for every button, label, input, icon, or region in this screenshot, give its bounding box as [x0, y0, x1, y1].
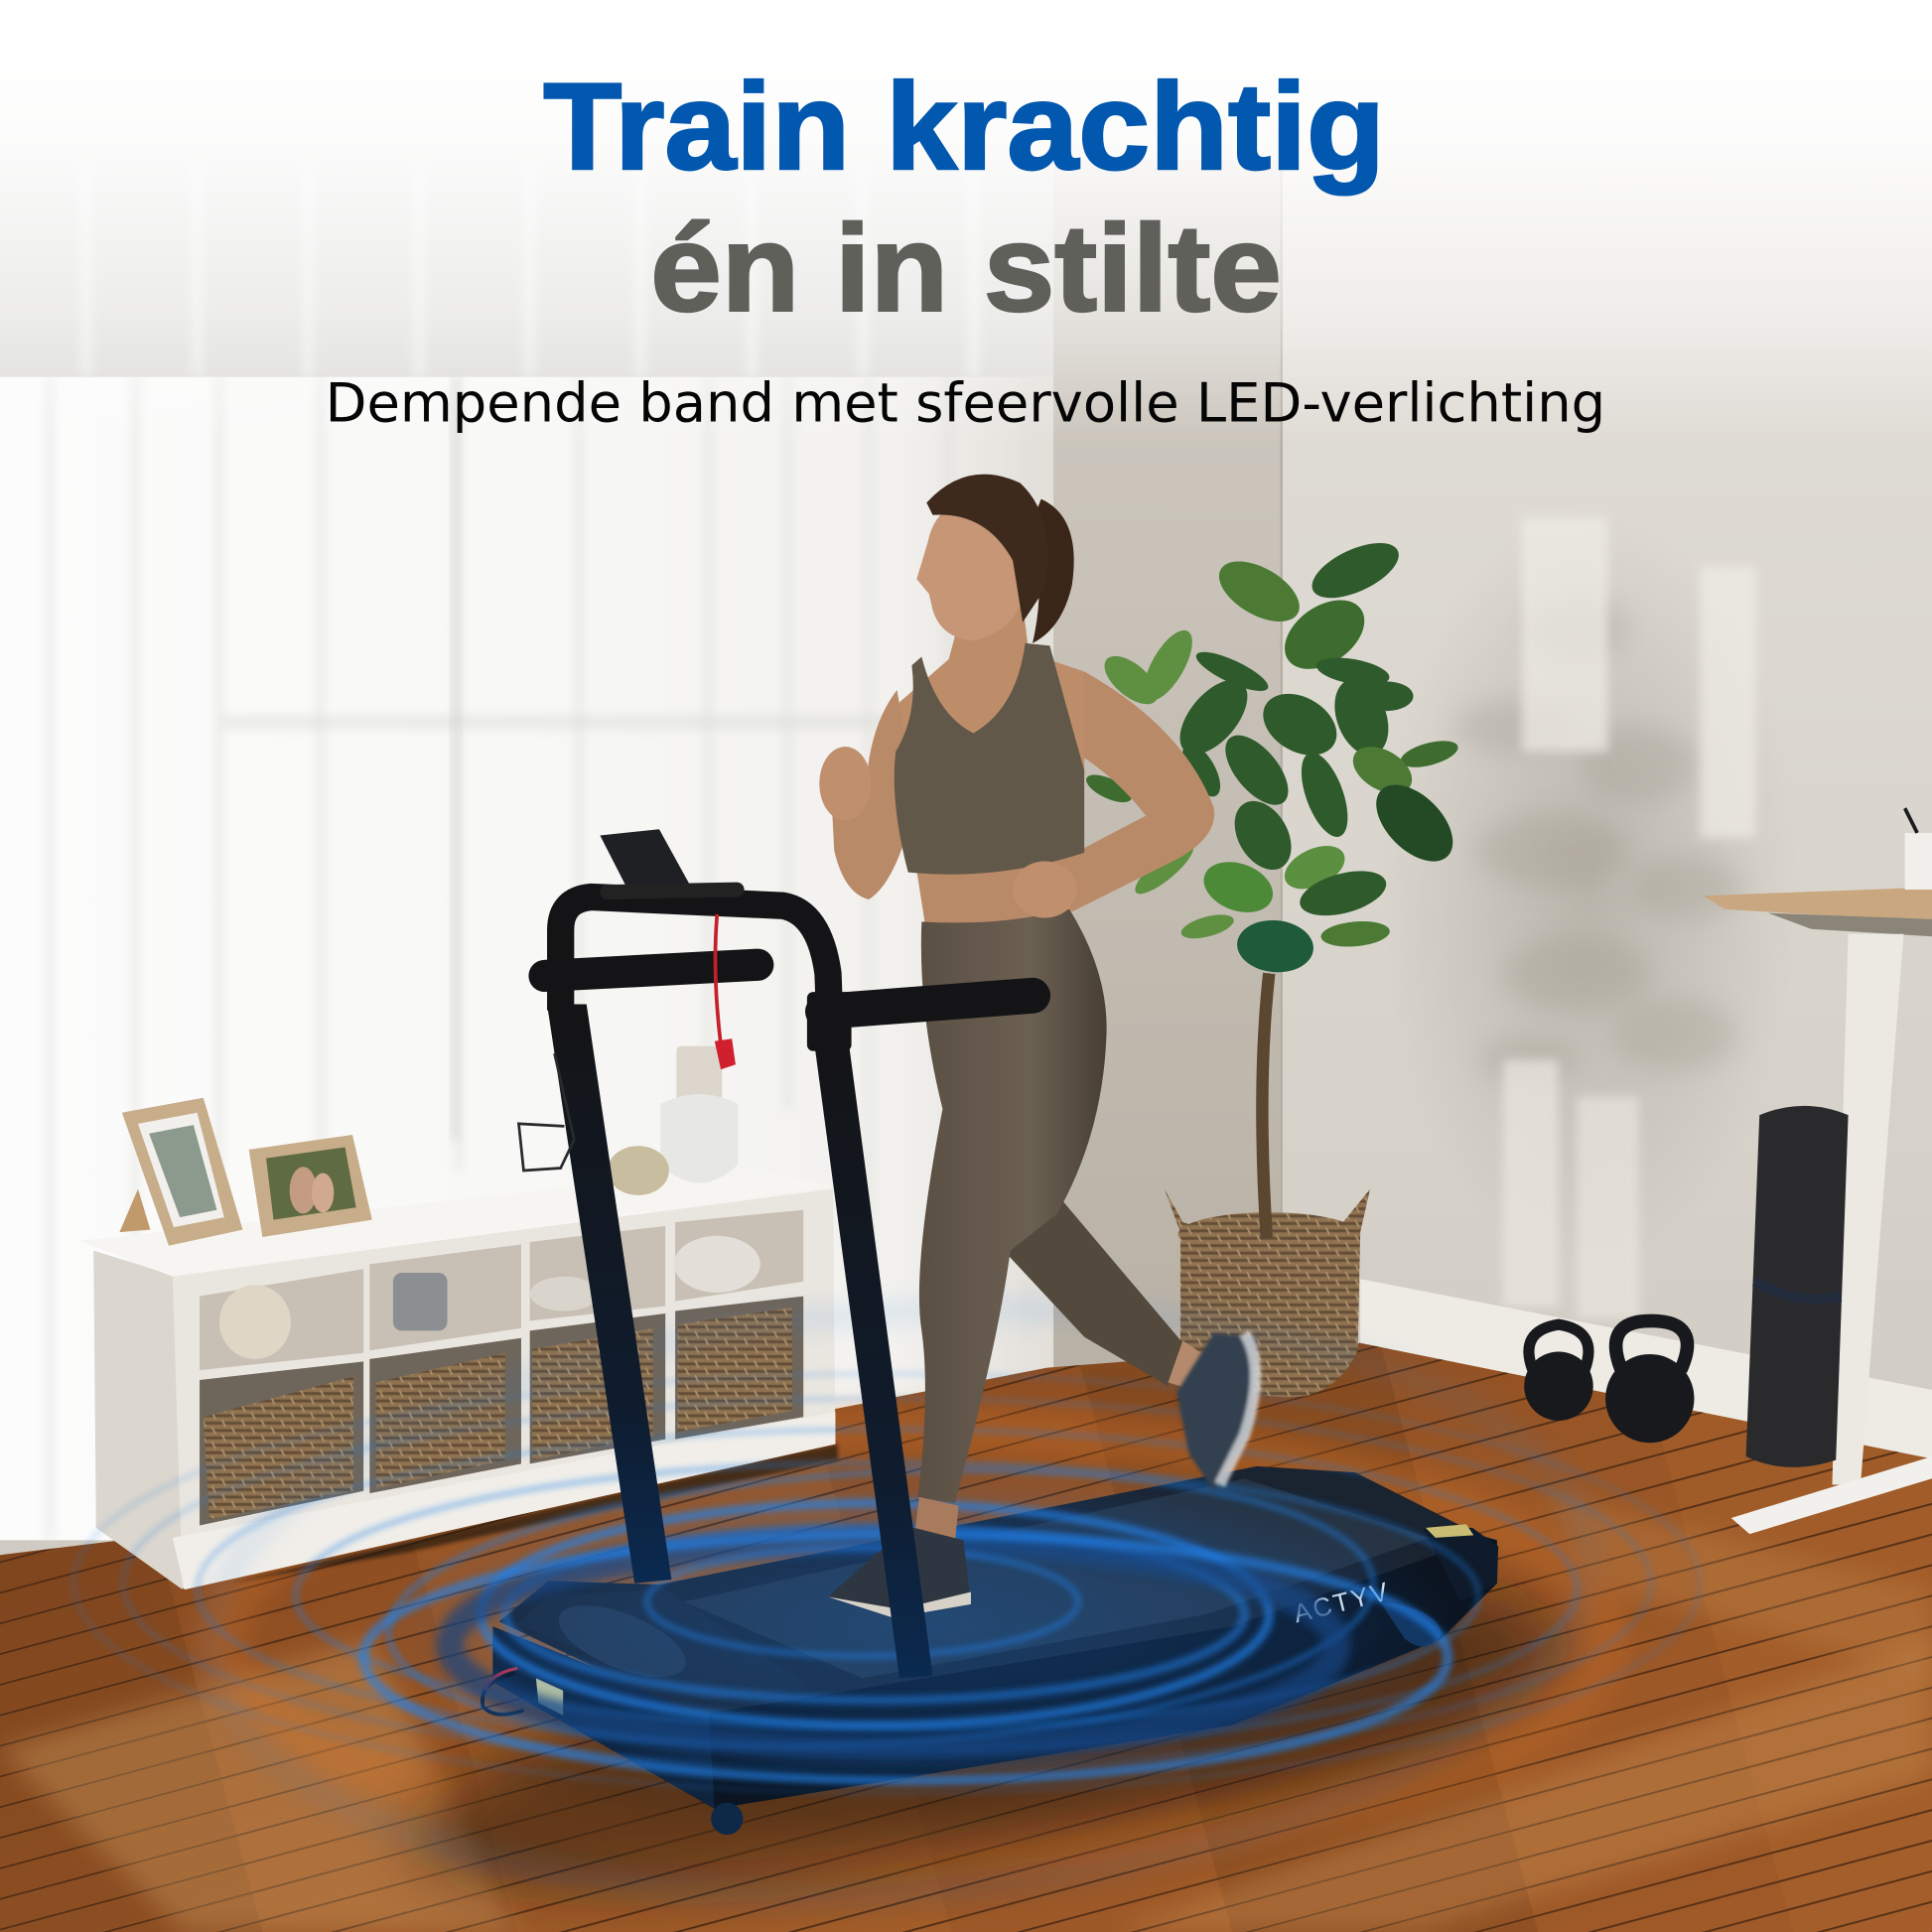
- cubbies: [200, 1210, 803, 1370]
- treadmill top deck: [499, 1466, 1484, 1716]
- blue deck glow: [382, 1466, 1466, 1787]
- neck and chest skin: [894, 604, 1084, 776]
- title line 1: Train krachtig: [543, 59, 1385, 196]
- rear ankle: [1169, 1340, 1213, 1392]
- decorative vase and woven box: [608, 1046, 738, 1195]
- back arm: [1044, 671, 1214, 911]
- midriff: [915, 840, 1082, 934]
- cabinet body: [93, 1189, 835, 1589]
- front cover: [517, 1589, 813, 1701]
- front shoe: [828, 1528, 971, 1616]
- basket: [1165, 1189, 1370, 1397]
- hair: [926, 475, 1048, 622]
- title line 2: én in stilte: [650, 201, 1282, 338]
- window curtains: [0, 160, 1053, 1540]
- left post: [547, 1004, 671, 1584]
- rear foot: [1380, 1601, 1442, 1647]
- floor shadow under treadmill: [396, 1528, 1576, 1932]
- rear leg: [998, 1182, 1182, 1386]
- right handle: [823, 996, 1033, 1012]
- front hand: [1013, 862, 1077, 918]
- blue sound rings: [73, 1265, 1701, 1932]
- rear shoe: [1176, 1333, 1257, 1491]
- lower leg skin: [914, 1497, 959, 1543]
- frame arch: [561, 897, 830, 1041]
- right post: [813, 1035, 932, 1678]
- running belt: [684, 1478, 1430, 1678]
- kettlebells: [1524, 1320, 1694, 1443]
- baskets: [204, 1308, 792, 1519]
- safety key cord: [715, 914, 721, 1044]
- shelf items: [219, 1285, 291, 1359]
- treadmill: [483, 1466, 1498, 1835]
- baseboard: [1360, 1279, 1932, 1461]
- front arm: [832, 690, 905, 899]
- cabinet shadow: [228, 1445, 838, 1584]
- treadmill base: [492, 1528, 1497, 1809]
- sports top: [895, 643, 1084, 875]
- leaves: [1082, 532, 1466, 975]
- foam roller: [1746, 1106, 1849, 1467]
- tablet holder: [600, 829, 692, 891]
- leggings: [918, 909, 1107, 1503]
- storage cabinet: [80, 1169, 838, 1589]
- orange floor reflection: [221, 1430, 1601, 1849]
- wooden floor: [0, 1343, 1932, 1932]
- sunlight and plant shadow on wall: [1380, 505, 1799, 1318]
- rear cap: [1423, 1528, 1498, 1601]
- cup holder: [518, 1053, 574, 1171]
- left handle: [545, 965, 758, 976]
- ponytail: [1029, 499, 1074, 643]
- standing desk: [1703, 808, 1932, 1534]
- head: [916, 495, 1029, 640]
- potted plant: [1082, 532, 1466, 1397]
- front wheel and cable: [711, 1803, 743, 1835]
- trunk: [1262, 973, 1269, 1238]
- photo frames: [119, 1098, 372, 1246]
- brand logo: ACTYV: [1291, 1576, 1393, 1628]
- subtitle: Dempende band met sfeervolle LED-verlichting: [326, 370, 1605, 434]
- handlebar frame: [518, 829, 830, 1584]
- runner: [807, 475, 1257, 1678]
- top white fade: [0, 0, 1932, 444]
- pen cup: [1905, 833, 1932, 890]
